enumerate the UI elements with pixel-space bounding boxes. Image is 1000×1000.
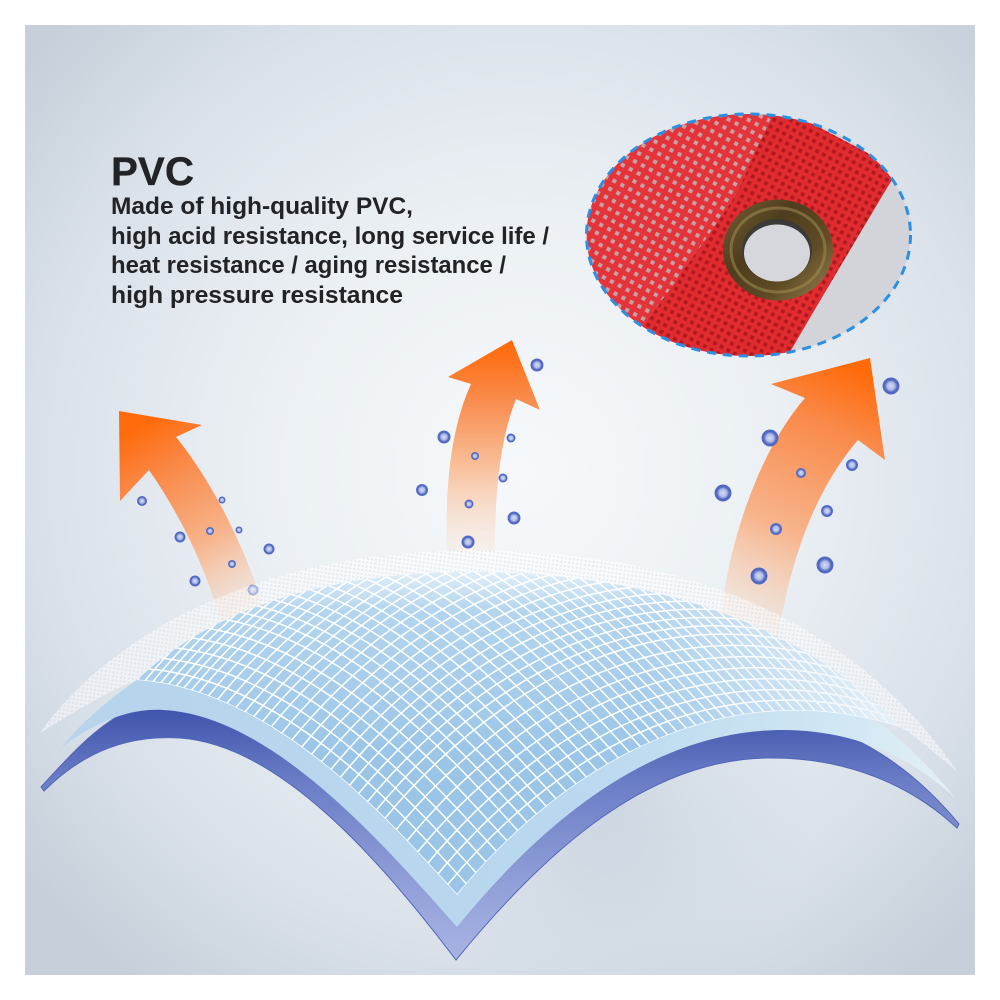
- bubbles: middle group: [416, 358, 544, 548]
- description text: high acid resistance, long service life /: [111, 223, 549, 250]
- white grid lines: [137, 572, 900, 895]
- dashed outline: [586, 114, 910, 356]
- arrow: right: [720, 358, 885, 638]
- description text: Made of high-quality PVC,: [111, 193, 413, 220]
- arrow: middle: [447, 340, 540, 552]
- white fine mesh top edge: [40, 550, 958, 772]
- description text: high pressure resistance: [111, 282, 403, 309]
- top layer: blue grid panel: [137, 572, 900, 895]
- grommet: [723, 200, 833, 300]
- arrow: left: [119, 411, 262, 625]
- title: PVC: [111, 150, 194, 194]
- bottom layer: dark blue: [41, 708, 959, 960]
- red open mesh: [586, 114, 780, 328]
- bubbles: left group: [137, 496, 274, 596]
- inset: red mesh tarp with grommet: [585, 112, 912, 358]
- red folded hem: [643, 116, 892, 356]
- bubbles: right group: [714, 378, 900, 584]
- grid right fade: [670, 602, 899, 733]
- inset backdrop: white tarp: [630, 128, 910, 354]
- description text: [111, 193, 549, 309]
- layered fabric sheet: [40, 550, 960, 961]
- description text: heat resistance / aging resistance /: [111, 252, 506, 279]
- middle layer: light blue: [62, 678, 955, 927]
